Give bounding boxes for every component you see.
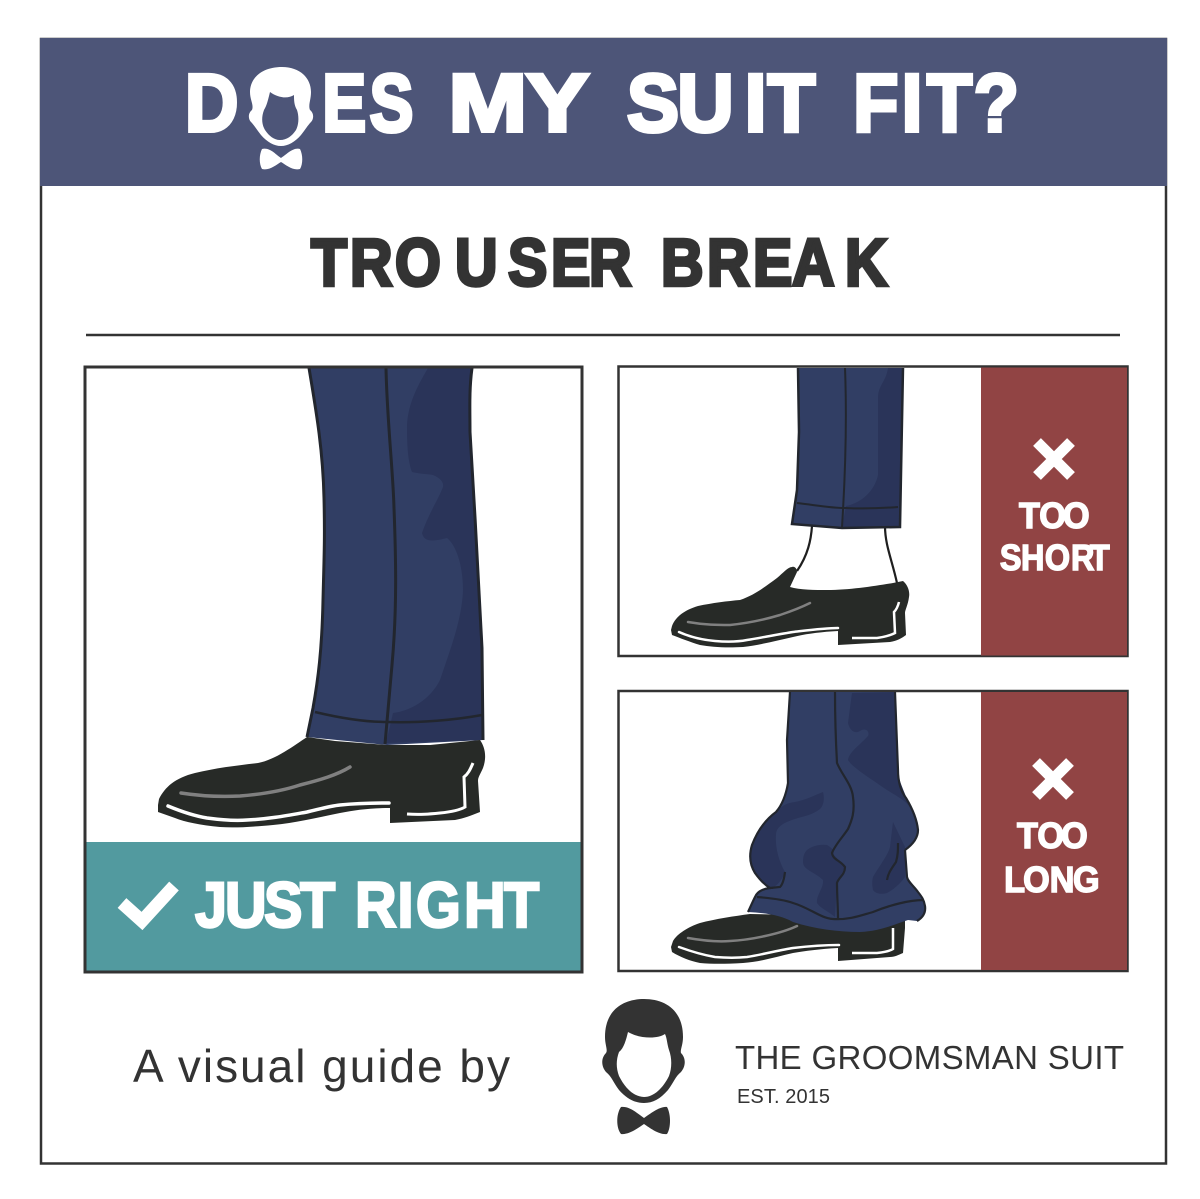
socks and ankle: [797, 526, 897, 583]
icon: cross: [1037, 442, 1071, 476]
icon: check mark: [122, 886, 174, 921]
footer credit text: A visual guide by: [133, 1040, 510, 1092]
title: MY: [448, 57, 589, 149]
trouser: too short: [792, 368, 903, 528]
trouser: correct length: [307, 368, 483, 745]
title: ES: [322, 57, 413, 149]
established date: EST. 2015: [737, 1086, 830, 1108]
icon: cross: [1036, 762, 1070, 796]
shoe: under long trouser: [671, 914, 905, 964]
brand name: THE GROOMSMAN SUIT: [735, 1039, 1124, 1076]
label bar: too long: LONG: [1004, 860, 1100, 900]
label bar: too long: TOO: [1017, 816, 1088, 856]
label bar: too short: [981, 368, 1127, 656]
panel: too long: [618, 691, 1128, 971]
header banner: [40, 38, 1167, 186]
title: D: [185, 56, 238, 149]
label bar: too short: SHORT: [1000, 538, 1110, 578]
label bar: too short: TOO: [1019, 496, 1090, 536]
title: [185, 56, 1019, 149]
icon: head with bow tie in title: [249, 67, 313, 169]
panel: too short: [618, 366, 1128, 656]
panel: just right: [85, 367, 582, 972]
shoe: loafer: [671, 567, 909, 647]
label bar: just right: [86, 842, 582, 972]
label bar: too long: [981, 692, 1127, 970]
icon: logo head with bow tie: [602, 999, 685, 1134]
heading: trouser break: TROUSER BREAK: [311, 226, 888, 300]
label bar: just right: JUST RIGHT: [195, 869, 539, 941]
title: FIT?: [853, 56, 1019, 149]
shoe: oxford: [158, 737, 485, 827]
trouser: too long: [748, 692, 925, 932]
title: SUIT: [627, 57, 815, 148]
